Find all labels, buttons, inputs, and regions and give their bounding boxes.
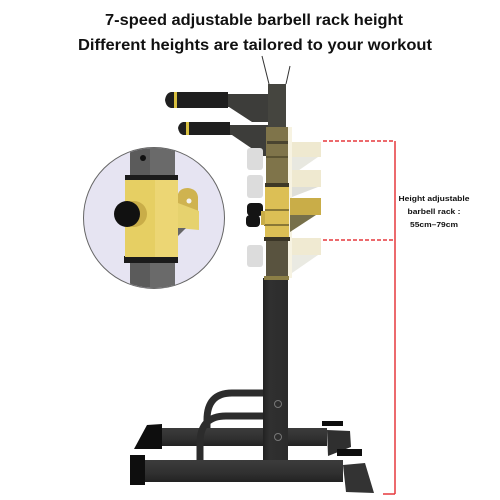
- title: [78, 12, 433, 54]
- height label: Height adjustable: [398, 194, 470, 203]
- height label: barbell rack :: [408, 207, 460, 216]
- icon: fold-out height arrow marks: [262, 56, 290, 84]
- height bracket: [323, 141, 395, 494]
- height label: [398, 194, 470, 229]
- base bars: [145, 428, 343, 482]
- column bolts: [274, 400, 282, 440]
- yellow sleeve: [265, 187, 289, 237]
- ghost knobs: [247, 148, 263, 267]
- title: Different heights are tailored to your workout: [78, 37, 433, 54]
- translucent sleeve: [266, 127, 288, 187]
- left feet: [130, 424, 162, 485]
- adjustable sleeve with ghost positions: [246, 127, 321, 280]
- ghost sleeve positions: [288, 127, 321, 278]
- knob detail: [130, 201, 147, 227]
- column detail: [130, 148, 175, 288]
- title: 7-speed adjustable barbell rack height: [105, 12, 404, 29]
- hook detail: [178, 188, 198, 212]
- main column: [263, 84, 288, 460]
- upper dip handle: [165, 92, 270, 122]
- lower translucent band: [266, 241, 288, 278]
- yellow rack arm: [290, 198, 321, 215]
- lower dip handle: [178, 122, 268, 156]
- height label: 55cm–79cm: [410, 220, 458, 229]
- dip bars: [200, 393, 265, 460]
- knob: [246, 203, 265, 227]
- rack frame: [130, 84, 374, 493]
- right feet: [322, 421, 374, 493]
- detail circle: [83, 147, 225, 289]
